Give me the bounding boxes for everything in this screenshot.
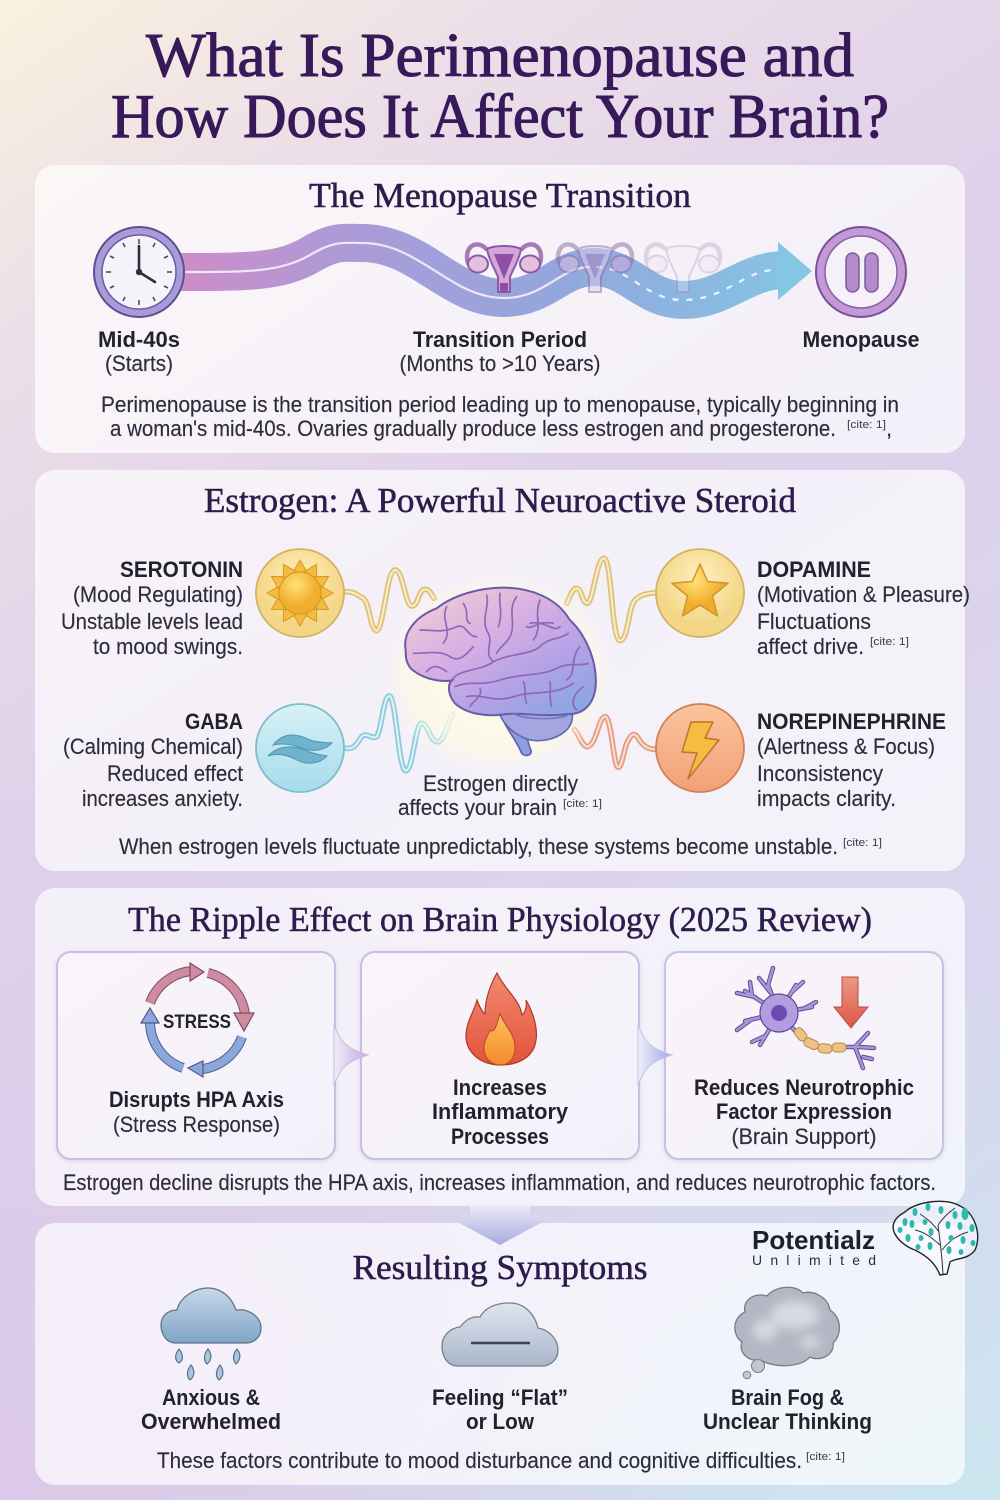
label: increases inflammatory processes: Increases bbox=[453, 1075, 547, 1100]
icon: uterus fading bbox=[558, 244, 632, 292]
arrow: ripple to symptoms bbox=[454, 1205, 546, 1245]
panel: resulting symptoms bbox=[35, 1223, 965, 1485]
text: estrogen directly affects your brain: [cite: 1] bbox=[563, 798, 602, 810]
logo: potentialz unlimited: Potentialz bbox=[752, 1225, 875, 1255]
text: serotonin bbox=[61, 557, 243, 659]
label: transition period: (Months to >10 Years) bbox=[400, 351, 600, 376]
label: disrupts hpa axis: (Stress Response) bbox=[113, 1112, 280, 1137]
text: ripple summary: Estrogen decline disrupts the HPA axis, increases inflammation, and reduces neurotrophic factors. bbox=[63, 1170, 936, 1195]
label: feeling flat or low: Feeling “Flat” bbox=[432, 1385, 568, 1410]
label: mid-40s: Mid-40s bbox=[98, 327, 180, 352]
icon: star (dopamine) bbox=[656, 549, 744, 637]
icon: stress cycle: STRESS bbox=[163, 1012, 231, 1033]
icon: uterus faintest bbox=[646, 244, 720, 292]
heading: ripple effect: The Ripple Effect on Brain Physiology (2025 Review) bbox=[128, 900, 872, 939]
label: feeling flat or low bbox=[432, 1385, 568, 1434]
icon: pause bbox=[816, 227, 906, 317]
logo: potentialz unlimited: Unlimited bbox=[752, 1252, 876, 1268]
text: serotonin: Unstable levels lead bbox=[61, 609, 243, 634]
title bbox=[111, 22, 889, 151]
label: anxious and overwhelmed: Anxious & bbox=[162, 1385, 260, 1410]
text: gaba: (Calming Chemical) bbox=[63, 734, 243, 759]
icon: neuron bbox=[737, 968, 874, 1068]
label: reduces neurotrophic factor expression: (Brain Support) bbox=[732, 1124, 876, 1149]
card: disrupts hpa axis bbox=[57, 952, 335, 1159]
text: perimenopause definition: , bbox=[886, 416, 892, 441]
card: neurotrophic factor bbox=[665, 952, 943, 1159]
panel: ripple effect on brain physiology bbox=[35, 888, 965, 1206]
panel: the menopause transition bbox=[35, 165, 965, 453]
title: How Does It Affect Your Brain? bbox=[111, 83, 889, 151]
heading: the menopause transition: The Menopause Transition bbox=[309, 176, 691, 215]
text: dopamine bbox=[757, 557, 970, 659]
card: inflammatory processes bbox=[361, 952, 639, 1159]
text: norepinephrine: (Alertness & Focus) bbox=[757, 734, 935, 759]
icon: rain cloud bbox=[161, 1288, 261, 1380]
label: reduces neurotrophic factor expression bbox=[694, 1075, 914, 1149]
label: brain fog bbox=[703, 1385, 872, 1434]
signal waves to brain bbox=[346, 558, 656, 771]
text: dopamine: affect drive. bbox=[757, 634, 864, 659]
icon: sun (serotonin) bbox=[256, 549, 344, 637]
text: gaba: Reduced effect bbox=[107, 761, 243, 786]
heading: estrogen: Estrogen: A Powerful Neuroactive Steroid bbox=[204, 481, 797, 520]
logo: potentialz unlimited bbox=[752, 1201, 978, 1275]
arrow: card 2 to card 3 bbox=[638, 1024, 672, 1086]
text: norepinephrine: impacts clarity. bbox=[757, 786, 896, 811]
label: reduces neurotrophic factor expression: Reduces Neurotrophic bbox=[694, 1075, 914, 1100]
heading: resulting symptoms: Resulting Symptoms bbox=[352, 1248, 648, 1287]
text: estrogen directly affects your brain: Estrogen directly bbox=[423, 771, 578, 796]
icon: stress cycle bbox=[141, 963, 254, 1077]
text: symptoms summary: [cite: 1] bbox=[806, 1451, 845, 1463]
label: reduces neurotrophic factor expression: Factor Expression bbox=[716, 1099, 892, 1124]
text: serotonin: to mood swings. bbox=[93, 634, 243, 659]
icon: uterus solid bbox=[467, 244, 541, 292]
label: increases inflammatory processes: Processes bbox=[451, 1124, 549, 1149]
title: What Is Perimenopause and bbox=[146, 22, 854, 90]
text: symptoms summary: These factors contribute to mood disturbance and cognitive difficulties. bbox=[157, 1448, 802, 1473]
label: transition period bbox=[400, 327, 600, 376]
icon: flame bbox=[466, 973, 536, 1065]
icon: brain bbox=[385, 573, 615, 773]
label: disrupts hpa axis: Disrupts HPA Axis bbox=[109, 1087, 284, 1112]
text: gaba: increases anxiety. bbox=[82, 786, 243, 811]
text: gaba bbox=[63, 709, 243, 811]
label: anxious and overwhelmed bbox=[141, 1385, 281, 1434]
text: perimenopause definition: Perimenopause is the transition period leading up to menopause, typically beginning in bbox=[101, 392, 899, 417]
text: perimenopause definition bbox=[101, 392, 899, 441]
text: perimenopause definition: a woman's mid-40s. Ovaries gradually produce less estrogen and progesterone. bbox=[110, 416, 836, 441]
text: dopamine: (Motivation & Pleasure) bbox=[757, 582, 970, 607]
label: transition period: Transition Period bbox=[413, 327, 587, 352]
text: estrogen directly affects your brain bbox=[398, 771, 602, 820]
text: dopamine: DOPAMINE bbox=[757, 557, 871, 582]
label: brain fog: Brain Fog & bbox=[731, 1385, 844, 1410]
arrow: card 1 to card 2 bbox=[334, 1024, 368, 1086]
icon: fog thought cloud bbox=[735, 1287, 839, 1379]
label: menopause: Menopause bbox=[802, 327, 920, 352]
timeline ribbon arrow bbox=[180, 242, 812, 300]
icon: lightning bolt (norepinephrine) bbox=[656, 704, 744, 792]
text: dopamine: [cite: 1] bbox=[870, 636, 909, 648]
text: gaba: GABA bbox=[185, 709, 243, 734]
text: norepinephrine: Inconsistency bbox=[757, 761, 883, 786]
panel: estrogen neuroactive steroid bbox=[35, 470, 970, 871]
text: perimenopause definition: [cite: 1] bbox=[847, 419, 886, 431]
icon: clock bbox=[94, 227, 184, 317]
text: estrogen directly affects your brain: affects your brain bbox=[398, 795, 557, 820]
label: increases inflammatory processes: Inflammatory bbox=[432, 1099, 569, 1124]
icon: waves (gaba) bbox=[256, 704, 344, 792]
text: norepinephrine bbox=[757, 709, 946, 811]
label: anxious and overwhelmed: Overwhelmed bbox=[141, 1409, 281, 1434]
text: estrogen fluctuation note: When estrogen levels fluctuate unpredictably, these systems become unstable. bbox=[119, 834, 838, 859]
label: disrupts hpa axis bbox=[109, 1087, 284, 1137]
label: increases inflammatory processes bbox=[432, 1075, 569, 1149]
label: feeling flat or low: or Low bbox=[466, 1409, 535, 1434]
text: serotonin: (Mood Regulating) bbox=[73, 582, 243, 607]
icon: flat cloud bbox=[442, 1303, 558, 1366]
text: estrogen fluctuation note: [cite: 1] bbox=[843, 837, 882, 849]
label: mid-40s: (Starts) bbox=[105, 351, 173, 376]
label: brain fog: Unclear Thinking bbox=[703, 1409, 872, 1434]
text: serotonin: SEROTONIN bbox=[120, 557, 243, 582]
text: dopamine: Fluctuations bbox=[757, 609, 871, 634]
label: mid-40s bbox=[98, 327, 180, 376]
text: norepinephrine: NOREPINEPHRINE bbox=[757, 709, 946, 734]
icon: red down arrow bbox=[834, 977, 868, 1028]
